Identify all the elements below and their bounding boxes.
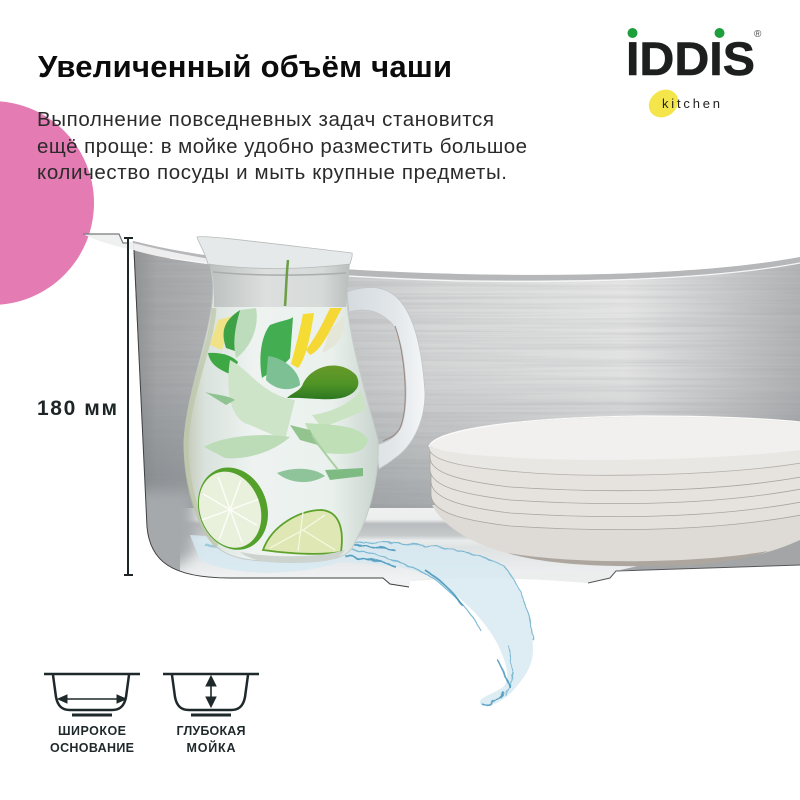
logo yellow blob	[643, 84, 684, 123]
icon: wide base sink	[44, 674, 140, 715]
jug base	[240, 550, 345, 563]
lime half	[287, 365, 358, 399]
logo wordmark: IDDIS	[626, 32, 755, 85]
pink circle	[0, 101, 94, 305]
stack of plates	[429, 416, 800, 566]
icon label: deep sink: МОЙКА	[186, 740, 236, 755]
logo: IDDIS kitchen	[626, 28, 762, 123]
jug body	[184, 255, 378, 562]
icon label: deep sink	[176, 724, 246, 755]
logo kitchen text: kitchen	[662, 96, 720, 111]
description text: ещё проще: в мойке удобно разместить большое	[37, 135, 527, 158]
description text	[37, 108, 527, 184]
jug neck	[208, 262, 350, 307]
logo wordmark: ®	[754, 29, 762, 40]
dimension label: 180 мм	[37, 397, 117, 420]
pale mint leaves	[228, 360, 295, 440]
icon label: wide base: ОСНОВАНИЕ	[50, 741, 134, 755]
glass jug with lemon water	[184, 237, 425, 563]
jug rim	[197, 237, 352, 268]
water edge tint	[186, 308, 217, 546]
top plate	[429, 416, 800, 475]
description text: Выполнение повседневных задач становится	[37, 108, 494, 131]
sink bowl	[125, 240, 800, 590]
dimension line: 180 mm	[37, 238, 133, 575]
water splash	[190, 535, 533, 705]
description text: количество посуды и мыть крупные предметы.	[37, 161, 507, 184]
sink illustration	[83, 234, 800, 590]
sink rim left	[83, 234, 200, 260]
jug handle	[347, 288, 425, 469]
mint leaves dark	[260, 317, 293, 378]
icon label: wide base: ШИРОКОЕ	[58, 724, 126, 738]
sink floor ledge	[180, 508, 634, 586]
lime slice half	[263, 510, 342, 554]
mint stem	[285, 260, 288, 306]
icon label: wide base	[50, 724, 134, 755]
icon label: deep sink: ГЛУБОКАЯ	[176, 724, 246, 738]
lime slice round	[187, 458, 279, 560]
icon: deep sink	[163, 674, 259, 715]
lemon slices	[291, 313, 314, 368]
plate bottom bowl	[432, 505, 800, 566]
title: Увеличенный объём чаши	[38, 49, 452, 84]
